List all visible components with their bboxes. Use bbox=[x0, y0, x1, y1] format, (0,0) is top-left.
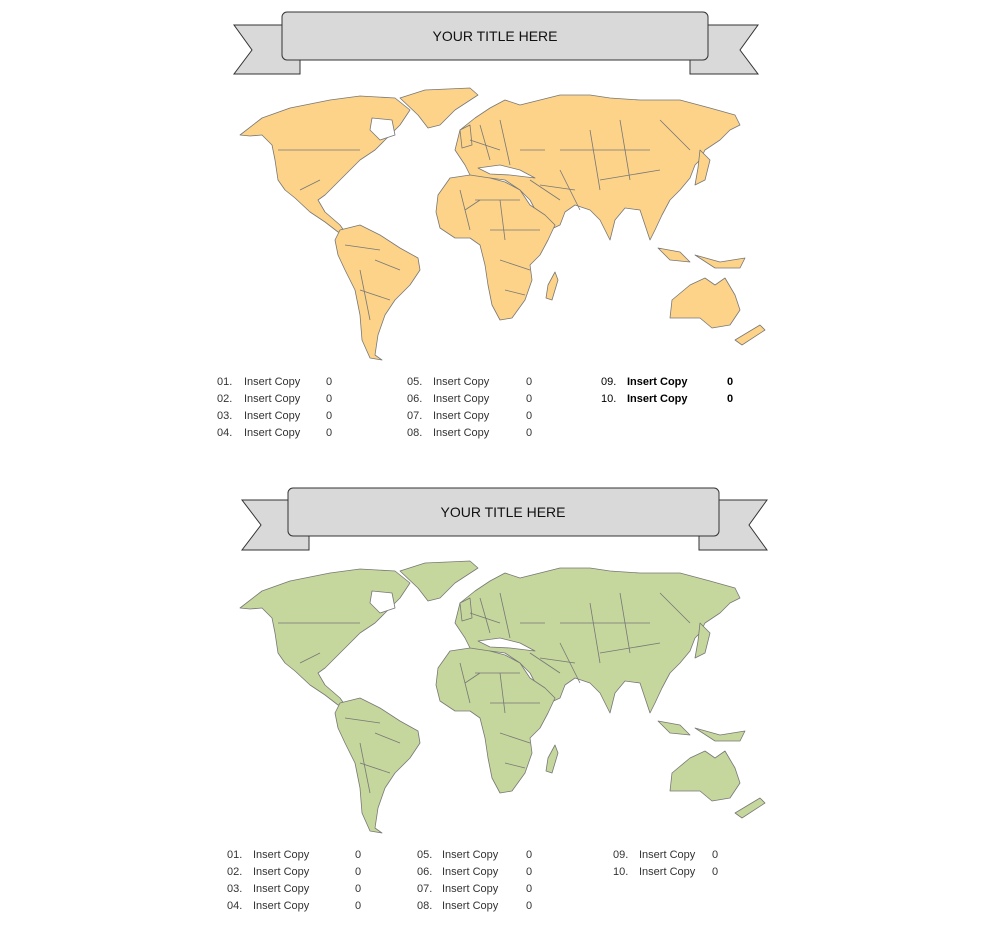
legend: top: 0 bbox=[326, 427, 332, 439]
legend: bottom: 0 bbox=[355, 849, 361, 861]
legend: bottom: 10. bbox=[613, 866, 628, 878]
legend: bottom bbox=[227, 849, 718, 912]
legend: top: Insert Copy bbox=[244, 410, 300, 422]
legend: bottom: 0 bbox=[526, 883, 532, 895]
legend: bottom: 07. bbox=[417, 883, 432, 895]
legend: bottom: 09. bbox=[613, 849, 628, 861]
legend: top: 0 bbox=[526, 427, 532, 439]
legend: top: 02. bbox=[217, 393, 232, 405]
legend: top: 07. bbox=[407, 410, 422, 422]
legend: bottom: 0 bbox=[526, 866, 532, 878]
legend: top: 0 bbox=[326, 376, 332, 388]
legend: bottom: 0 bbox=[355, 900, 361, 912]
legend: bottom: 05. bbox=[417, 849, 432, 861]
legend: bottom: 0 bbox=[712, 866, 718, 878]
legend: bottom: Insert Copy bbox=[442, 866, 498, 878]
legend: bottom: 03. bbox=[227, 883, 242, 895]
legend: bottom: 0 bbox=[526, 900, 532, 912]
legend: top bbox=[217, 376, 733, 439]
legend: bottom: 0 bbox=[712, 849, 718, 861]
legend: bottom: 0 bbox=[526, 849, 532, 861]
legend: top: 0 bbox=[526, 393, 532, 405]
legend: bottom: 04. bbox=[227, 900, 242, 912]
legend: top: Insert Copy bbox=[244, 376, 300, 388]
legend: top: Insert Copy bbox=[244, 427, 300, 439]
legend: bottom: 06. bbox=[417, 866, 432, 878]
legend: top: 08. bbox=[407, 427, 422, 439]
legend: top: 06. bbox=[407, 393, 422, 405]
banner: top title bbox=[234, 12, 758, 74]
legend: top: 09. bbox=[601, 376, 616, 388]
legend: top: Insert Copy bbox=[433, 427, 489, 439]
legend: top: 05. bbox=[407, 376, 422, 388]
legend: top: 0 bbox=[326, 410, 332, 422]
legend: top: Insert Copy bbox=[433, 410, 489, 422]
legend: bottom: Insert Copy bbox=[639, 849, 695, 861]
banner: bottom title bbox=[242, 488, 767, 550]
legend: bottom: 0 bbox=[355, 866, 361, 878]
legend: bottom: 0 bbox=[355, 883, 361, 895]
legend: top: 03. bbox=[217, 410, 232, 422]
legend: top: 0 bbox=[526, 410, 532, 422]
banner: top title: YOUR TITLE HERE bbox=[432, 28, 558, 44]
legend: bottom: Insert Copy bbox=[442, 900, 498, 912]
legend: bottom: Insert Copy bbox=[253, 883, 309, 895]
legend: bottom: 01. bbox=[227, 849, 242, 861]
legend: top: Insert Copy bbox=[433, 376, 489, 388]
legend: top: 01. bbox=[217, 376, 232, 388]
legend: top: 0 bbox=[526, 376, 532, 388]
legend: bottom: Insert Copy bbox=[253, 900, 309, 912]
legend: bottom: Insert Copy bbox=[639, 866, 695, 878]
legend: bottom: 08. bbox=[417, 900, 432, 912]
legend: top: Insert Copy bbox=[433, 393, 489, 405]
legend: top: 0 bbox=[326, 393, 332, 405]
legend: bottom: Insert Copy bbox=[442, 883, 498, 895]
legend: bottom: Insert Copy bbox=[253, 849, 309, 861]
legend: top: 04. bbox=[217, 427, 232, 439]
map: top world map orange bbox=[240, 88, 765, 360]
legend: bottom: 02. bbox=[227, 866, 242, 878]
banner: bottom title: YOUR TITLE HERE bbox=[440, 504, 566, 520]
legend: bottom: Insert Copy bbox=[442, 849, 498, 861]
legend: top: 0 bbox=[727, 376, 733, 388]
legend: bottom: Insert Copy bbox=[253, 866, 309, 878]
legend: top: Insert Copy bbox=[244, 393, 300, 405]
legend: top: Insert Copy bbox=[627, 376, 688, 388]
map: bottom world map green bbox=[240, 561, 765, 833]
legend: top: 10. bbox=[601, 393, 616, 405]
legend: top: 0 bbox=[727, 393, 733, 405]
legend: top: Insert Copy bbox=[627, 393, 688, 405]
